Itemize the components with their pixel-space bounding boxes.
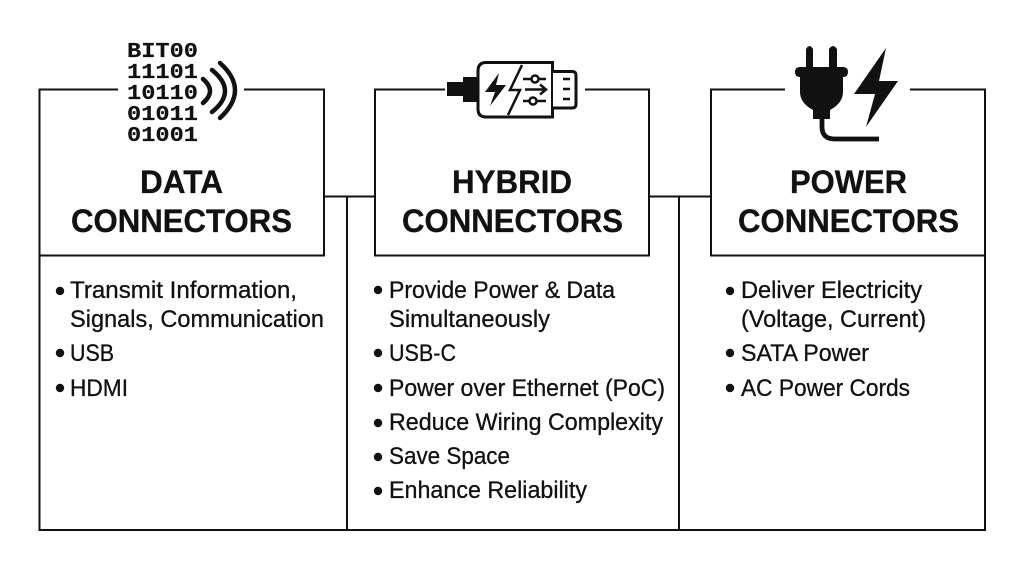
- icon: binary data with signal waves: [127, 41, 235, 148]
- list: hybrid connectors: Enhance Reliability: [389, 477, 587, 504]
- icon: binary data with signal waves: 11101: [127, 62, 198, 85]
- list: hybrid connectors: USB-C: [389, 340, 456, 367]
- heading: power connectors: CONNECTORS: [738, 203, 959, 239]
- panel: data connectors: [56, 164, 324, 402]
- heading: data connectors: CONNECTORS: [71, 203, 292, 239]
- list: data connectors: HDMI: [70, 375, 128, 402]
- icon: binary data with signal waves: 10110: [127, 83, 198, 106]
- list: data connectors: USB: [70, 340, 114, 367]
- heading: power connectors: POWER: [790, 164, 907, 200]
- list: power connectors: AC Power Cords: [741, 375, 910, 402]
- list: power connectors: [726, 277, 926, 402]
- heading: data connectors: [71, 164, 292, 239]
- list: hybrid connectors: Save Space: [389, 443, 510, 470]
- panel: power connectors: [726, 164, 959, 402]
- frame and connecting lines: [40, 90, 985, 530]
- icon: binary data with signal waves: 01001: [127, 125, 198, 148]
- heading: data connectors: DATA: [140, 164, 223, 200]
- icon: binary data with signal waves: BIT00: [127, 41, 198, 64]
- icon: power plug and lightning bolt: [795, 46, 898, 139]
- panel: hybrid connectors: [374, 164, 665, 504]
- icon: binary data with signal waves: 01011: [127, 104, 198, 127]
- list: hybrid connectors: Power over Ethernet (PoC): [389, 375, 665, 402]
- list: hybrid connectors: [374, 277, 665, 504]
- heading: hybrid connectors: CONNECTORS: [402, 203, 623, 239]
- list: power connectors: (Voltage, Current): [741, 306, 926, 333]
- list: data connectors: Signals, Communication: [70, 306, 324, 333]
- icon: USB plug with power and data symbols: [447, 62, 576, 117]
- heading: hybrid connectors: [402, 164, 623, 239]
- list: hybrid connectors: Simultaneously: [389, 306, 550, 333]
- list: power connectors: SATA Power: [741, 340, 869, 367]
- list: data connectors: Transmit Information,: [70, 277, 297, 304]
- list: power connectors: Deliver Electricity: [741, 277, 922, 304]
- list: data connectors: [56, 277, 324, 402]
- list: hybrid connectors: Provide Power & Data: [389, 277, 616, 304]
- list: hybrid connectors: Reduce Wiring Complexity: [389, 409, 663, 436]
- heading: hybrid connectors: HYBRID: [452, 164, 572, 200]
- heading: power connectors: [738, 164, 959, 239]
